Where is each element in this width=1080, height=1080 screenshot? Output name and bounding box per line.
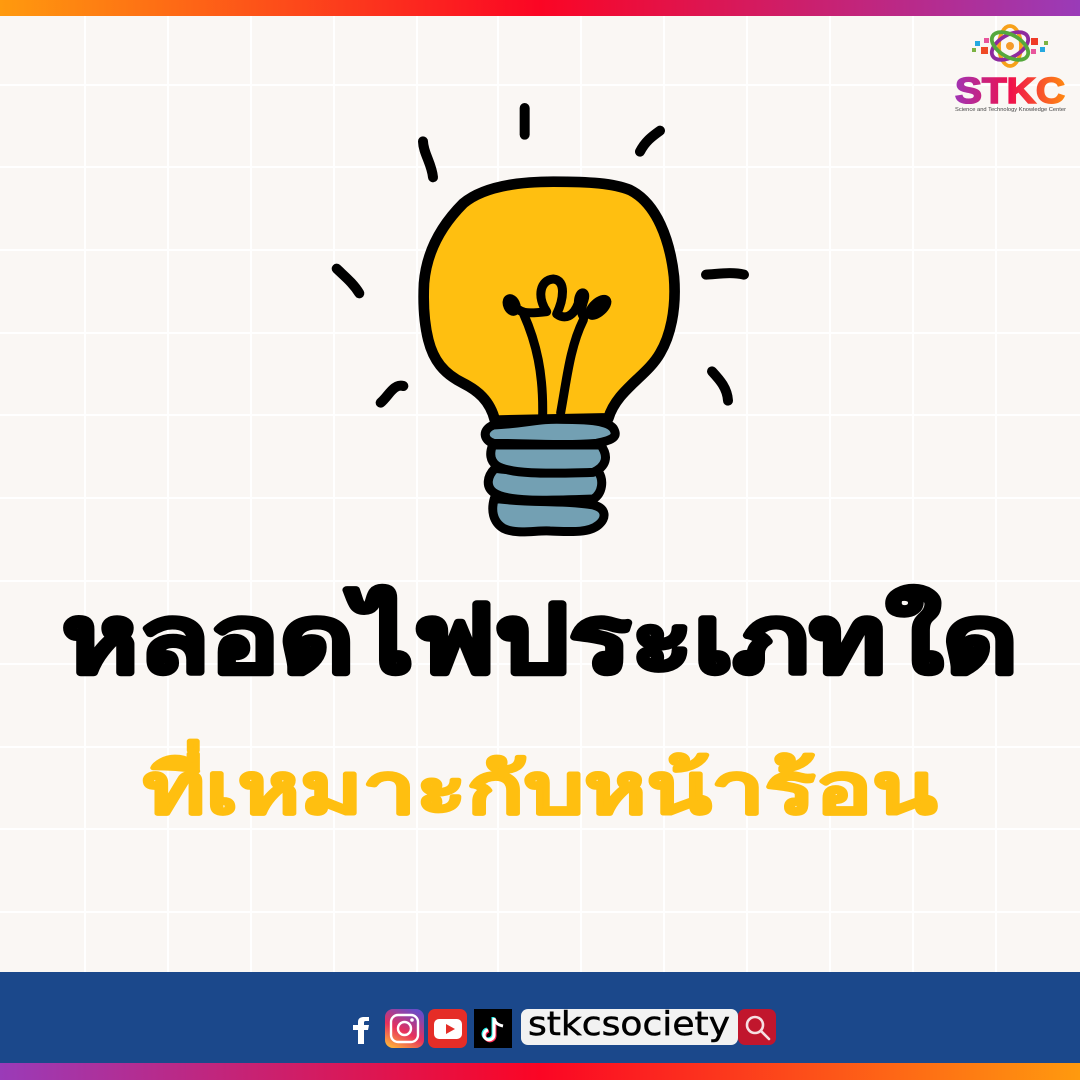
bulb filament	[505, 279, 609, 415]
icon: instagram	[385, 1009, 424, 1048]
title: หลอดไฟประเภทใด	[62, 586, 1018, 692]
bulb screw base	[485, 419, 615, 532]
social handle row	[353, 1004, 776, 1048]
icon: search	[738, 1009, 776, 1045]
footer band	[0, 972, 1080, 1063]
logo wordmark: STKC	[955, 70, 1065, 111]
bulb glass	[424, 182, 675, 421]
icon: youtube	[428, 1009, 467, 1048]
bottom gradient bar	[0, 1063, 1080, 1080]
icon: facebook	[353, 1017, 369, 1044]
icon: tiktok	[474, 1009, 512, 1048]
STKC logo	[955, 26, 1066, 113]
logo atom icon	[972, 26, 1048, 66]
subtitle: ที่เหมาะกับหน้าร้อน	[143, 739, 937, 828]
handle pill: stkcsociety	[528, 1004, 730, 1043]
logo caption: Science and Technology Knowledge Center	[955, 107, 1066, 113]
bulb rays	[337, 108, 744, 403]
icon: light bulb	[337, 108, 744, 532]
top gradient bar	[0, 0, 1080, 16]
